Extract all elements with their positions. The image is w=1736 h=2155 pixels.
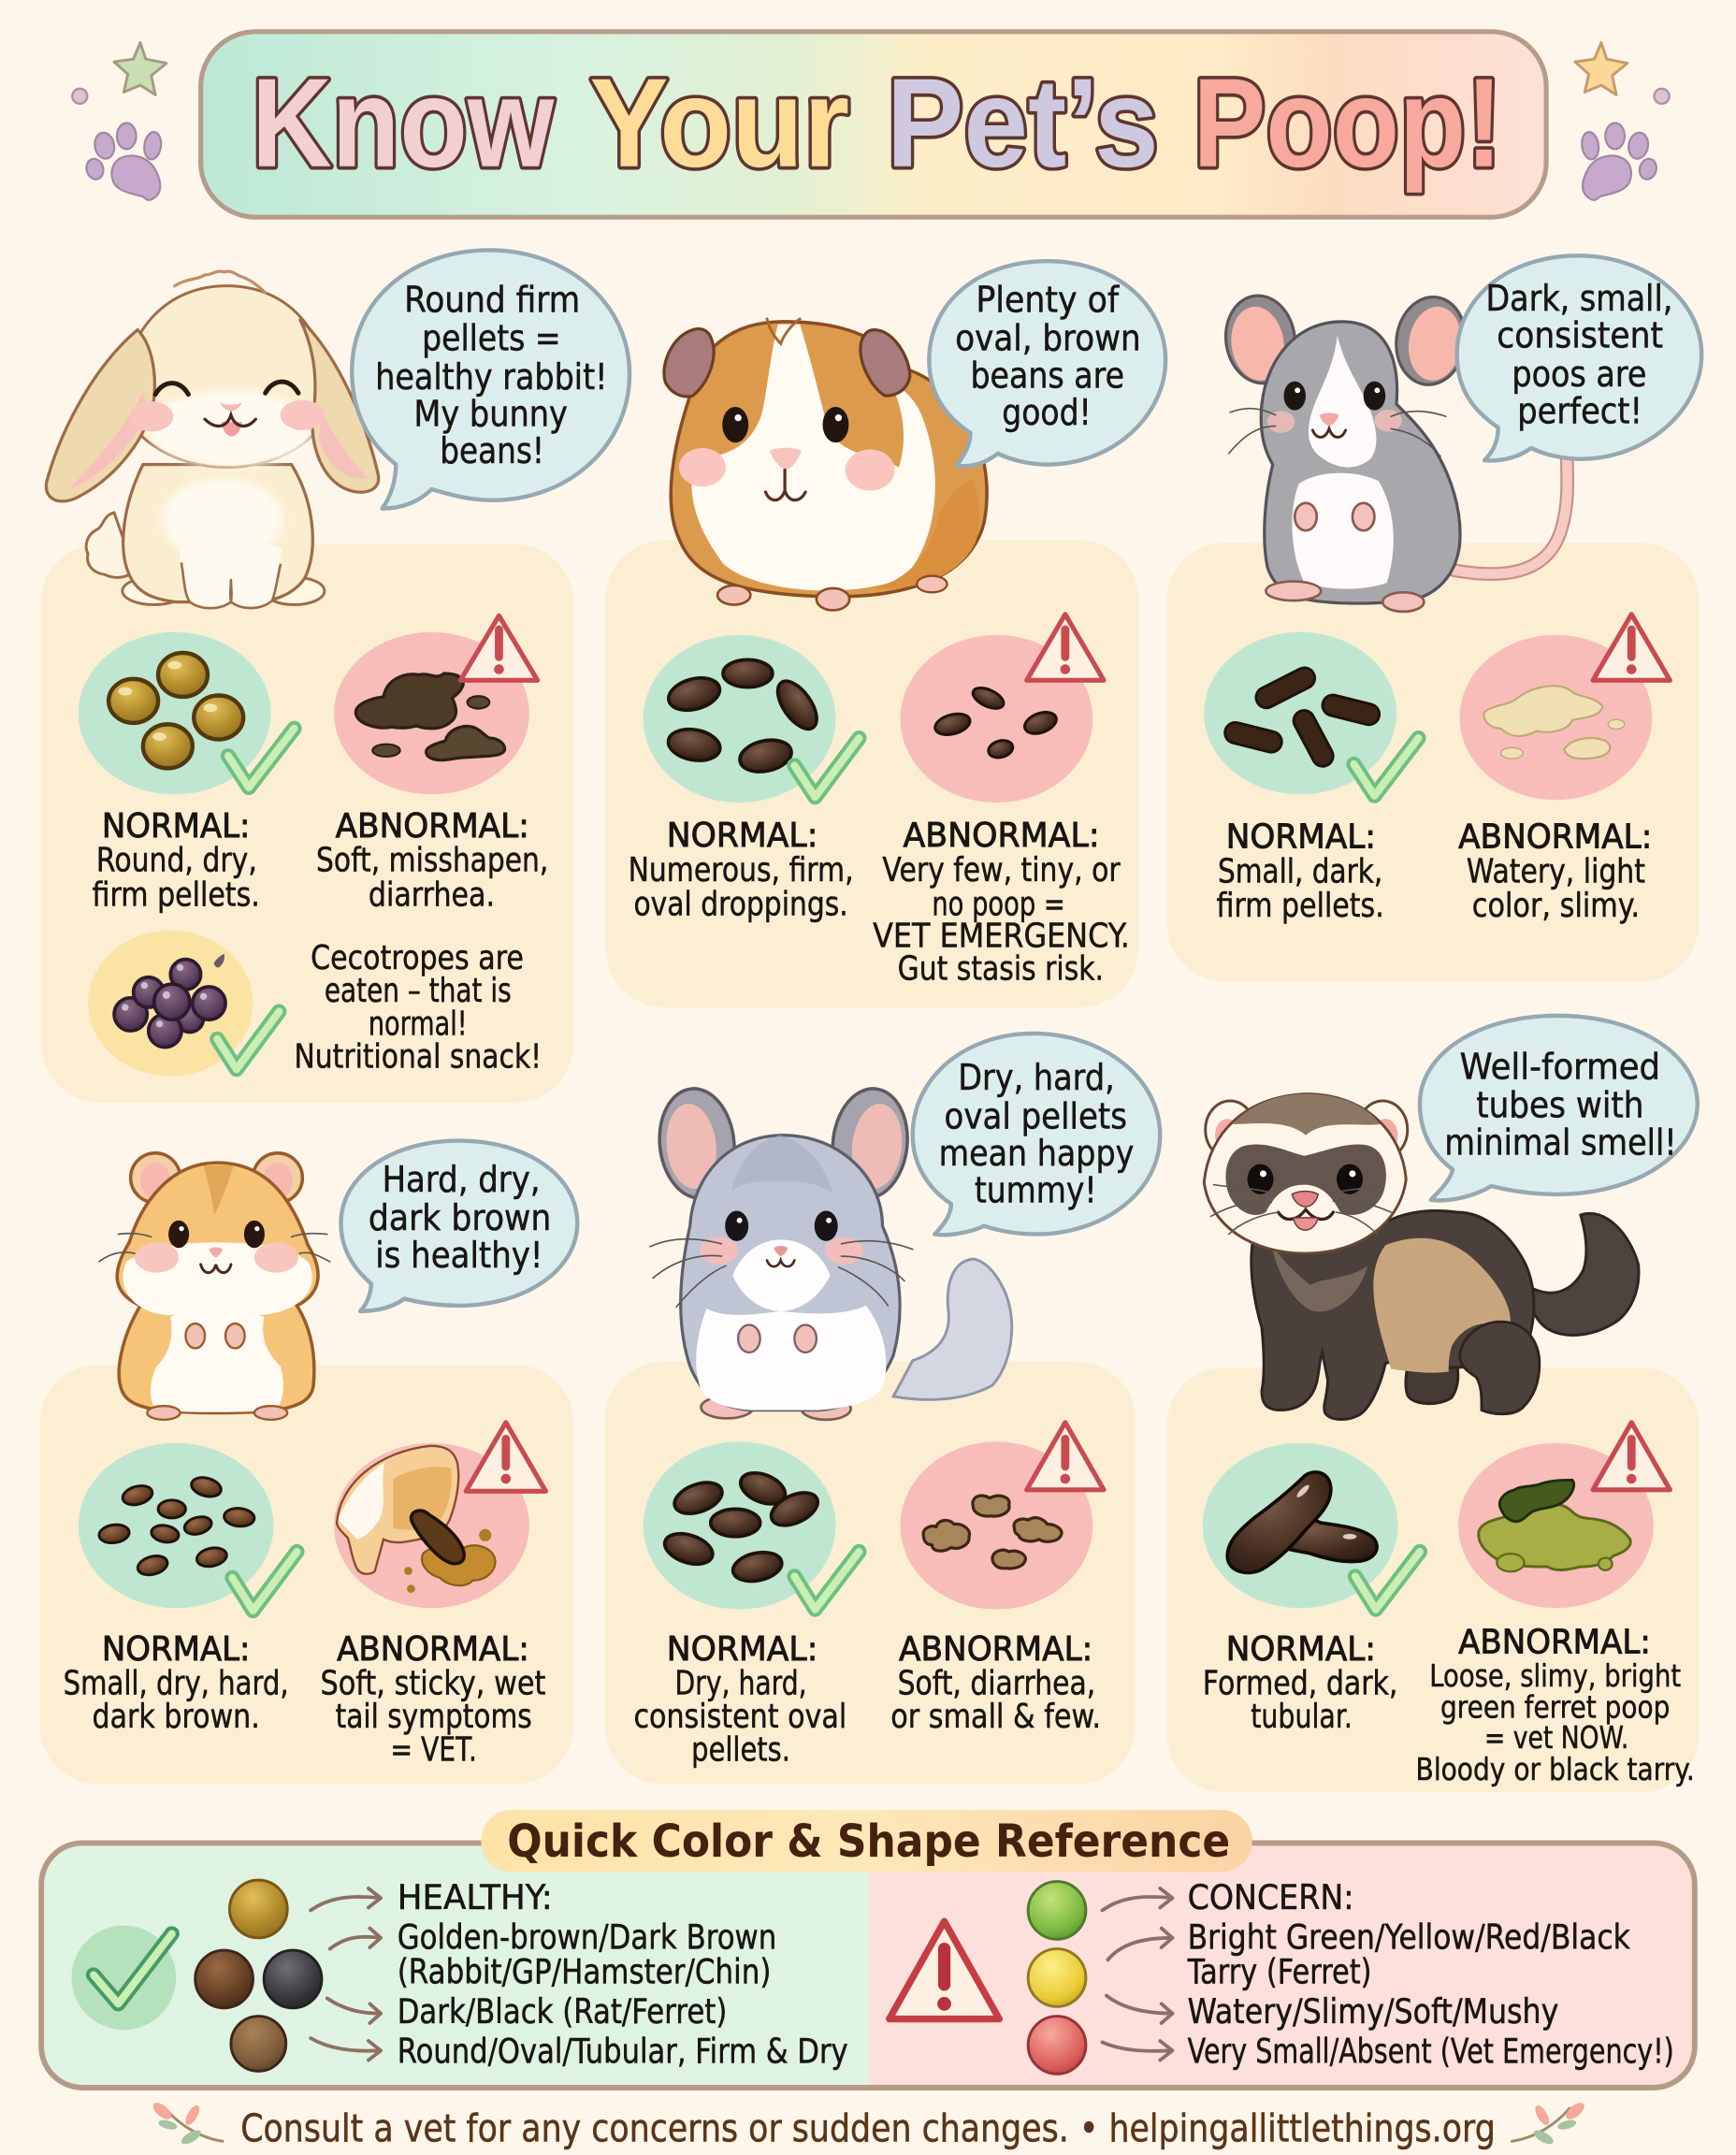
- reference panel: [41, 1810, 1695, 2088]
- abnormal text: [1458, 818, 1652, 925]
- abnormal poop: green slime: [1458, 1443, 1654, 1608]
- speech bubble: chinchilla: tummy!: [975, 1171, 1097, 1212]
- abnormal text: = vet NOW.: [1484, 1719, 1628, 1756]
- illustration: rabbit: [46, 271, 379, 608]
- normal poop: rabbit pellets: [79, 632, 271, 794]
- illustration: guinea pig: [664, 319, 987, 610]
- abnormal text: no poop =: [932, 886, 1065, 924]
- abnormal text: [890, 1630, 1101, 1736]
- panel: guinea pig: [606, 540, 1138, 1007]
- icon: warning: [1593, 615, 1670, 680]
- normal text: Numerous, firm,: [629, 851, 854, 889]
- normal text: [1216, 818, 1384, 925]
- title banner: [201, 32, 1546, 217]
- illustration: rat: [1221, 291, 1568, 612]
- normal poop: dry oval: [644, 1441, 835, 1610]
- normal text: firm pellets.: [1216, 887, 1384, 925]
- normal text: consistent oval: [633, 1698, 846, 1736]
- abnormal text: green ferret poop: [1440, 1689, 1670, 1726]
- abnormal text: color, slimy.: [1472, 887, 1640, 925]
- speech bubble: rabbit: healthy rabbit!: [375, 357, 608, 398]
- abnormal text: [316, 807, 548, 914]
- abnormal text: ABNORMAL:: [903, 817, 1100, 855]
- normal poop: oval droppings: [644, 635, 835, 803]
- speech bubble: ferret: minimal smell!: [1444, 1122, 1677, 1164]
- normal text: oval droppings.: [633, 886, 848, 924]
- icon: check: [228, 729, 295, 788]
- speech bubble: chinchilla: [913, 1034, 1160, 1235]
- normal text: NORMAL:: [1226, 1630, 1376, 1669]
- icon: warning: [460, 615, 538, 680]
- abnormal text: Soft, misshapen,: [316, 842, 548, 880]
- speech bubble: rat: Dark, small,: [1485, 279, 1672, 320]
- normal text: NORMAL:: [667, 1630, 817, 1669]
- abnormal text: ABNORMAL:: [1458, 818, 1652, 857]
- cecotropes text: Nutritional snack!: [295, 1038, 542, 1077]
- concern text: [1187, 1877, 1674, 2072]
- healthy text: Golden-brown/Dark Brown: [398, 1917, 776, 1958]
- icon: check: [794, 738, 859, 797]
- healthy text: (Rabbit/GP/Hamster/Chin): [398, 1951, 771, 1991]
- speech bubble: chinchilla: Dry, hard,: [958, 1058, 1115, 1099]
- abnormal poop: rabbit mush: [334, 632, 529, 794]
- icon: check: [1353, 738, 1418, 796]
- abnormal poop: few tiny: [901, 635, 1092, 803]
- normal text: Round, dry,: [96, 842, 257, 880]
- abnormal text: = VET.: [390, 1730, 477, 1769]
- panel: rat: [1167, 542, 1699, 981]
- abnormal text: ABNORMAL:: [899, 1630, 1092, 1669]
- abnormal text: [320, 1630, 545, 1769]
- icon: check: [217, 1011, 279, 1069]
- normal poop: small dark brown: [79, 1443, 273, 1608]
- reference heading: Quick Color & Shape Reference: [507, 1815, 1230, 1868]
- illustration: chinchilla: [650, 1085, 1012, 1420]
- healthy text: Round/Oval/Tubular, Firm & Dry: [398, 2032, 848, 2072]
- illustration: hamster: [99, 1153, 330, 1420]
- icon: check: [1355, 1552, 1420, 1610]
- normal text: firm pellets.: [93, 875, 260, 914]
- speech bubble: chinchilla: mean happy: [939, 1134, 1134, 1175]
- icon: warning: [1027, 1423, 1104, 1490]
- concern arrows: [1103, 1888, 1172, 2061]
- concern text: Bright Green/Yellow/Red/Black: [1188, 1917, 1630, 1958]
- panel: hamster: [40, 1365, 573, 1784]
- healthy arrows: [311, 1888, 381, 2061]
- speech bubble: guinea pig: beans are: [970, 355, 1124, 397]
- title: Know: [252, 52, 555, 194]
- icon: left sprig: [151, 2100, 223, 2147]
- normal text: NORMAL:: [1226, 818, 1376, 857]
- normal text: dark brown.: [93, 1698, 260, 1736]
- speech bubble: chinchilla: oval pellets: [945, 1096, 1127, 1137]
- abnormal poop: soft blobs: [901, 1441, 1092, 1610]
- footer note: Consult a vet for any concerns or sudden changes. • helpingallittlethings.org: [240, 2105, 1496, 2150]
- icon: right paw: [1580, 123, 1658, 200]
- concern text: Tarry (Ferret): [1187, 1951, 1372, 1991]
- speech bubble: guinea pig: good!: [1002, 393, 1092, 434]
- title: Poop!: [1194, 52, 1502, 194]
- abnormal text: tail symptoms: [336, 1698, 532, 1736]
- abnormal text: diarrhea.: [369, 875, 495, 914]
- icon: check: [232, 1552, 297, 1611]
- icon: big check: [71, 1926, 176, 2030]
- healthy samples: [195, 1880, 322, 2071]
- cecotropes text: normal!: [369, 1005, 468, 1043]
- icon: warning: [1593, 1423, 1670, 1490]
- cecotropes text: eaten – that is: [325, 972, 512, 1010]
- concern half: [869, 1843, 1695, 2088]
- icon: check: [794, 1552, 859, 1610]
- title: Your: [589, 52, 849, 194]
- abnormal text: Gut stasis risk.: [898, 950, 1104, 989]
- decoration: right dot: [1654, 89, 1670, 104]
- cecotropes: [88, 931, 253, 1077]
- healthy text: HEALTHY:: [398, 1877, 553, 1917]
- normal text: Dry, hard,: [675, 1665, 807, 1703]
- speech bubble: guinea pig: Plenty of: [976, 281, 1121, 322]
- speech bubble: hamster: dark brown: [369, 1198, 551, 1239]
- concern samples: [1028, 1882, 1086, 2074]
- normal text: [629, 817, 854, 924]
- speech bubble: hamster: is healthy!: [375, 1236, 542, 1277]
- abnormal poop: wet tail: [334, 1443, 529, 1608]
- speech bubble: hamster: [340, 1141, 577, 1311]
- icon: warning: [1027, 615, 1104, 680]
- healthy text: [398, 1877, 848, 2072]
- cecotropes text: [295, 939, 542, 1077]
- illustration: ferret: [1204, 1094, 1639, 1420]
- abnormal text: Soft, diarrhea,: [898, 1665, 1095, 1703]
- healthy text: Dark/Black (Rat/Ferret): [398, 1991, 727, 2032]
- abnormal text: Very few, tiny, or: [882, 851, 1121, 889]
- speech bubble: hamster: Hard, dry,: [383, 1160, 541, 1201]
- decoration: right star: [1575, 43, 1628, 94]
- speech bubble: ferret: Well-formed: [1460, 1047, 1660, 1088]
- normal text: Small, dark,: [1218, 852, 1382, 890]
- normal text: NORMAL:: [102, 1630, 251, 1669]
- speech bubble: rabbit: beans!: [440, 431, 544, 472]
- speech bubble: rat: [1457, 255, 1701, 460]
- normal poop: tubes: [1203, 1443, 1397, 1608]
- concern text: CONCERN:: [1188, 1877, 1353, 1917]
- abnormal text: [873, 817, 1130, 989]
- healthy half: [41, 1843, 869, 2088]
- panel: ferret: [1167, 1367, 1699, 1792]
- speech bubble: rat: perfect!: [1517, 392, 1642, 433]
- speech bubble: ferret: [1420, 1016, 1698, 1200]
- normal text: [93, 807, 260, 914]
- title: [252, 52, 1502, 194]
- icon: warning: [466, 1423, 545, 1491]
- speech bubble: rabbit: pellets =: [422, 319, 561, 360]
- normal text: pellets.: [691, 1730, 790, 1769]
- speech bubble: guinea pig: [929, 261, 1165, 466]
- normal text: [633, 1630, 846, 1769]
- normal text: NORMAL:: [667, 817, 817, 855]
- abnormal poop: watery light: [1460, 635, 1652, 800]
- speech bubble: rat: consistent: [1497, 316, 1663, 357]
- concern text: Watery/Slimy/Soft/Mushy: [1188, 1991, 1558, 2032]
- icon: right sprig: [1512, 2100, 1587, 2147]
- abnormal text: Loose, slimy, bright: [1429, 1657, 1681, 1694]
- speech bubble: ferret: tubes with: [1476, 1086, 1643, 1127]
- normal text: [64, 1630, 289, 1736]
- decoration: left dot: [72, 89, 87, 104]
- decoration: left star: [114, 43, 166, 94]
- normal text: Small, dry, hard,: [64, 1665, 289, 1703]
- abnormal text: ABNORMAL:: [337, 1630, 529, 1669]
- normal poop: small dark pellets: [1204, 632, 1396, 794]
- normal text: tubular.: [1251, 1698, 1353, 1736]
- icon: left paw: [84, 123, 163, 200]
- abnormal text: VET EMERGENCY.: [873, 917, 1130, 955]
- normal text: NORMAL:: [102, 807, 251, 846]
- cecotropes text: Cecotropes are: [311, 939, 524, 977]
- abnormal text: ABNORMAL:: [1458, 1624, 1651, 1662]
- speech bubble: rat: poos are: [1512, 354, 1646, 396]
- abnormal text: Bloody or black tarry.: [1416, 1751, 1695, 1787]
- title: Pet’s: [887, 52, 1159, 194]
- speech bubble: rabbit: Round firm: [404, 281, 580, 322]
- speech bubble: guinea pig: oval, brown: [955, 319, 1141, 360]
- normal text: [1203, 1630, 1397, 1736]
- abnormal text: [1416, 1624, 1695, 1787]
- panel: rabbit: [41, 544, 573, 1102]
- abnormal text: Watery, light: [1467, 852, 1645, 890]
- panel: chinchilla: [605, 1362, 1136, 1784]
- abnormal text: ABNORMAL:: [336, 807, 529, 846]
- speech bubble: rabbit: [352, 250, 629, 509]
- icon: big warning: [890, 1921, 999, 2019]
- speech bubble: rabbit: My bunny: [413, 395, 568, 436]
- abnormal text: or small & few.: [890, 1698, 1101, 1736]
- abnormal text: Soft, sticky, wet: [320, 1665, 545, 1703]
- normal text: Formed, dark,: [1203, 1665, 1397, 1703]
